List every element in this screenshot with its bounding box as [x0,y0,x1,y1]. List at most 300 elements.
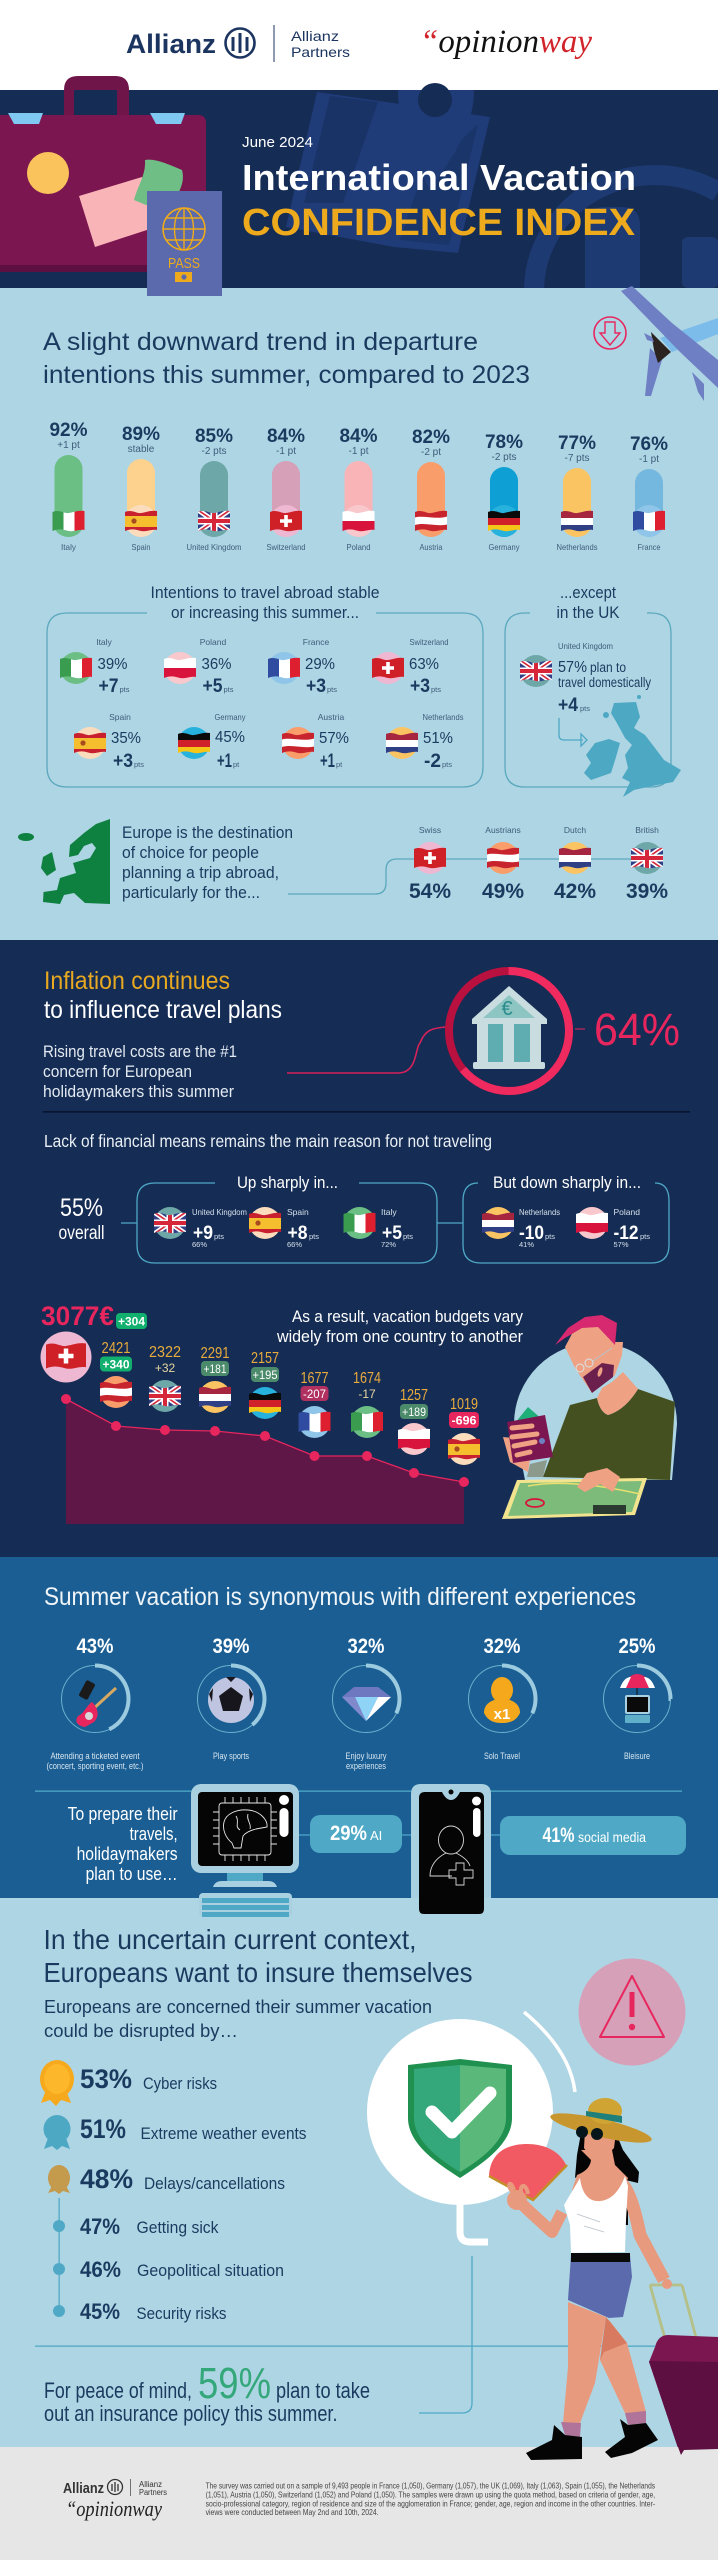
item: Switzerland [372,637,449,697]
item: Austria budget: +340 [102,1358,130,1372]
connector: Europe to nationalities [288,859,641,894]
heading: inflation: to influence travel plans [44,996,282,1024]
arrow: to UK map [559,718,587,746]
panel: departure intentions [0,286,718,940]
item: Poland: Poland [200,637,227,647]
item: France budget: 1677 [300,1370,328,1387]
item: Italy budget [351,1370,383,1438]
item: Netherlands: -2 [424,751,441,772]
risk: cyber: Cyber risks [143,2074,217,2093]
text: rising travel costs: holidaymakers this summer [43,1082,234,1101]
item: Austria: 57% [319,730,349,747]
bar: Germany [485,432,523,552]
risk: sick: Getting sick [136,2218,219,2237]
risk: geopolitical [53,2257,284,2282]
item: United Kingdom: pts [214,1232,224,1241]
item: Netherlands: pts [442,760,452,769]
line from shield bubble [419,2256,472,2413]
heading: except in the UK: ...except [560,583,616,602]
bar: Germany: 78% [485,432,523,453]
risk: security [53,2299,226,2324]
item: Netherlands: Netherlands [519,1207,560,1217]
text: to prepare their travels: travels, [130,1823,178,1844]
background Allianz arc motif [534,175,718,288]
heading: lack of financial means: Lack of financial means remains the main reason for not traveling [44,1131,492,1151]
illustration: passport overlap [147,288,222,296]
item: France: 29% [305,656,335,673]
item: Dutch: Dutch [564,825,586,835]
item: United Kingdom: 66% [192,1240,207,1249]
item: Italy: pts [403,1232,413,1241]
title [242,157,636,244]
item: France: +3 [306,676,326,697]
callout: social media: social media [578,1829,646,1845]
map: Europe [18,819,110,904]
icon: soccer ball [208,1677,254,1723]
callout: social media: 41% [542,1824,575,1847]
experience: play sports: Play sports [213,1751,249,1762]
heading: stable or increasing: Intentions to travel abroad stable [150,583,380,602]
survey methodology note: views were conducted between May 2nd and 10th, 2024. [206,2508,379,2517]
text: peace of mind: 59% [198,2359,271,2408]
experience: solo travel: 32% [484,1635,521,1658]
experience: play sports [198,1635,264,1762]
text: Europe destination [122,823,293,902]
illustration: airplane [621,286,718,401]
logo: Allianz Partners: Partners [291,44,350,60]
heading: inflation [44,967,282,1024]
illustration: passport: PASS [168,255,200,272]
item: Dutch [554,825,596,903]
bar: Germany: Germany [488,542,520,552]
risk: security: 45% [80,2299,120,2324]
bar: France [630,434,668,552]
text: peace of mind: For peace of mind, [44,2378,192,2403]
bar: Spain: 89% [122,424,160,445]
item: Italy: Italy [96,637,113,647]
experience: play sports: 39% [212,1635,250,1658]
figure: 64%: 64% [594,1004,680,1055]
logo: Allianz Partners footer: Allianz [63,2480,104,2497]
item: United Kingdom [154,1207,247,1249]
heading: A slight downward trend in departure [43,328,478,356]
item: Italy: 39% [98,656,128,673]
item: United Kingdom: United Kingdom [192,1207,247,1217]
logo: Allianz Partners footer: Allianz [139,2480,162,2489]
bar: Austria: Austria [420,542,443,552]
panel: down sharply [463,1173,669,1263]
figure: 55% overall: overall [58,1223,104,1244]
item: Italy: Italy [381,1207,397,1217]
experience: bleisure [604,1635,670,1762]
area and line [61,1394,469,1524]
bar: Austria [412,427,450,552]
bar: France: 76% [630,434,668,455]
text: vacation budgets vary [276,1308,524,1346]
item: Poland: pts [640,1232,650,1241]
tick to percent [575,1028,585,1030]
text: to prepare their travels: holidaymakers [77,1843,178,1864]
item: Spain budget: -696 [452,1414,477,1428]
panel: insurance [0,1898,718,2449]
item: Germany budget: +195 [252,1368,278,1382]
item: Netherlands: 41% [519,1240,534,1249]
chart: 64 percent ring [449,971,569,1091]
keyboard [199,1893,292,1917]
item: Switzerland: pts [431,685,441,694]
bar: Italy: 92% [49,420,88,441]
timeline line [58,2198,60,2310]
heading: up sharply: Up sharply in... [237,1173,338,1192]
connector: text to ring [287,1027,446,1073]
item: Italy: +5 [382,1223,402,1244]
divider [35,1790,682,1792]
item: Netherlands [386,712,464,772]
item: Poland [164,637,234,697]
panel: United Kingdom exception [505,583,681,797]
item: UK budget [149,1344,181,1412]
item: Germany [178,712,246,772]
item: Netherlands [482,1207,560,1249]
item: Austria: Austria [318,712,344,722]
title: CONFIDENCE INDEX [242,202,636,244]
icon: gold medal [40,2060,74,2106]
text: concerned: could be disrupted by… [44,2020,238,2041]
icon: solo traveller: x1 [494,1706,510,1723]
risk: weather [44,2114,306,2150]
item: Spain: pts [309,1232,319,1241]
UK figures: travel domestically [558,675,651,690]
icon: shield [408,2059,512,2178]
item: Austrians: Austrians [485,825,521,835]
item: Poland budget: 1257 [400,1387,428,1404]
experience: luxury: Enjoy luxury [346,1751,387,1762]
bar: United Kingdom [186,426,242,552]
risk: geopolitical: 46% [80,2257,121,2282]
item: Austria [282,712,349,772]
logo: Allianz Partners: Allianz [291,28,339,44]
item: Spain budget: 1019 [450,1396,478,1413]
text: to prepare their travels: To prepare their [68,1803,178,1824]
bar: Switzerland [266,426,306,552]
text: vacation budgets vary: As a result, vacation budgets vary [292,1308,524,1326]
bar: Netherlands: 77% [558,433,596,454]
risk: cyber: 53% [80,2064,132,2094]
icon: guitar and microphone [76,1680,116,1727]
heading: stable or increasing [150,583,380,622]
item: Italy: +7 [98,676,118,697]
illustration: passport [147,191,222,296]
item: Spain [74,712,144,772]
experience: ticketed event: (concert, sporting event, etc.) [46,1761,144,1772]
experience: luxury [332,1635,400,1772]
divider [43,1111,690,1113]
risk: delays: Delays/cancellations [144,2174,285,2193]
illustration: suitcase foot [678,2447,718,2455]
icon: person with cross [430,1826,473,1885]
chart: departure intentions by country [49,420,668,552]
item: Italy [344,1207,413,1249]
bar: United Kingdom: United Kingdom [186,542,242,552]
item: Spain [249,1207,319,1249]
illustration: suitcase [0,76,206,272]
bar: Switzerland: Switzerland [266,542,306,552]
item: Spain: Spain [109,712,131,722]
item: Germany: 45% [215,729,245,746]
bar: Switzerland: 84% [267,426,305,447]
item: Spain: +8 [288,1223,308,1244]
item: Swiss: 54% [409,880,451,903]
text: to prepare their travels [68,1803,178,1884]
item: United Kingdom: +9 [193,1223,213,1244]
bar: France: France [638,542,661,552]
item: Switzerland: 63% [409,656,439,673]
item: Italy: 72% [381,1240,396,1249]
heading: except in the UK [556,583,620,622]
title: International Vacation [242,157,636,198]
item: France: France [303,637,329,647]
UK figures: United Kingdom [558,641,613,651]
text: peace of mind [44,2359,370,2426]
bar: Spain: Spain [132,542,151,552]
figure: 55% overall [58,1194,104,1244]
item: Germany: Germany [214,712,246,722]
text: Europe destination: planning a trip abroad, [122,863,279,882]
icon: umbrella and laptop [620,1674,655,1723]
panel: summer experiences [0,1557,718,1898]
item: UK budget: +32 [155,1361,176,1375]
item: Italy: pts [120,685,130,694]
bar: United Kingdom: -2 pts [201,446,227,457]
text: Europe destination: Europe is the destination [122,823,293,842]
item: British: 39% [626,880,668,903]
text: vacation budgets vary: widely from one country to another [276,1328,523,1346]
item: Netherlands: 51% [423,730,453,747]
heading: insurance: In the uncertain current context, [44,1924,416,1955]
connector lines [299,1834,500,1836]
item: Poland: 57% [614,1240,629,1249]
bar: Netherlands [556,433,598,552]
heading: insurance: Europeans want to insure themselves [44,1957,472,1988]
text: rising travel costs: Rising travel costs are the #1 [43,1042,237,1061]
item: Netherlands budget: 2291 [200,1345,230,1362]
illustration: woman with hat, fan and suitcase [489,2098,718,2449]
bar: Austria: 82% [412,427,450,448]
text: Europe destination: particularly for the... [122,883,260,902]
risk: sick: 47% [80,2214,120,2239]
item: Switzerland: Switzerland [410,637,449,647]
item: Poland budget: +189 [402,1405,426,1419]
bar: Netherlands: -7 pts [564,453,590,464]
callout: AI: AI [370,1828,382,1843]
figure: 55% overall: 55% [60,1194,103,1222]
logo: Allianz Partners [126,25,350,62]
illustration: shoes over footer [526,2419,658,2460]
icon: diamond [342,1687,391,1721]
illustration: smartphone with social media [411,1784,491,1914]
item: Swiss: Swiss [419,825,441,835]
icon: bronze medal [48,2165,70,2194]
logo: opinionway: “opinionway [420,24,592,60]
text: peace of mind: out an insurance policy this summer. [44,2401,338,2426]
item: Spain budget [448,1396,480,1465]
item: Germany: pt [233,760,240,769]
illustration: computer with AI [191,1784,299,1917]
UK figures: 57% [558,659,587,676]
item: Germany budget [249,1350,281,1419]
illustration: man with wallet and map [502,1315,677,1519]
item: Switzerland: +3 [410,676,430,697]
bar: Germany: -2 pts [491,452,517,463]
panel: stable or increasing [47,583,483,787]
divider [35,2346,655,2347]
item: Italy budget: 1674 [353,1370,381,1387]
bar: Poland: -1 pt [348,446,369,457]
item: Spain: pts [134,760,144,769]
item: Poland [576,1207,650,1249]
text: Europe destination: of choice for people [122,843,259,862]
item: Austrians [482,825,524,903]
item: Poland: +5 [202,676,223,697]
header logo band [0,0,718,90]
risk: sick [53,2214,219,2239]
risk: geopolitical: Geopolitical situation [137,2261,284,2280]
date: June 2024 [242,134,313,151]
item: Poland: pts [224,685,234,694]
item: Austria budget [100,1340,132,1408]
risk: security: Security risks [136,2304,226,2323]
item: British: British [635,825,659,835]
item: Spain: Spain [287,1207,309,1217]
bar: Spain: stable [128,444,155,455]
experience: luxury: experiences [346,1761,386,1772]
risk: delays: 48% [80,2164,133,2194]
UK figures: plan to [590,660,626,675]
text: peace of mind: plan to take [276,2378,370,2403]
item: Italy budget: -17 [358,1387,376,1401]
risk: weather: 51% [80,2114,126,2144]
heading: except in the UK: in the UK [556,603,620,622]
bar: Spain [122,424,160,552]
icon: blue medal [44,2115,70,2150]
panel: hero banner [0,76,718,296]
bar: Poland: 84% [339,426,378,447]
heading [43,328,530,389]
logo: opinionway footer: “opinionway [66,2496,162,2521]
heading: insurance [44,1924,472,1988]
connector lines [121,1222,463,1224]
item: Austria: +1 [320,751,335,772]
icon: warning [578,1958,686,2066]
item: Netherlands budget [199,1345,231,1413]
background map and pin motif [286,83,490,253]
risk: weather: Extreme weather events [140,2124,306,2143]
item: Germany budget: 2157 [251,1350,279,1367]
item: Spain: +3 [113,751,133,772]
chart: vacation budgets [40,1301,480,1524]
item: Netherlands: pts [545,1232,555,1241]
UK figures: pts [580,704,590,713]
item: British [626,825,668,903]
item: Switzerland budget: 3077€ [41,1301,114,1331]
item: Switzerland budget [40,1301,147,1382]
item: Poland budget [398,1387,430,1455]
UK figures [520,641,651,716]
panel: inflation [0,940,718,1558]
bar: Austria: -2 pt [421,447,441,458]
panel: up sharply [137,1173,437,1263]
experience: ticketed event [46,1635,144,1772]
heading: intentions this summer, compared to 2023 [43,361,530,389]
item: Netherlands: Netherlands [422,712,464,722]
survey methodology note [206,2482,655,2517]
bar: Italy: +1 pt [57,440,80,451]
heading: inflation: Inflation continues [44,967,230,995]
bar: Switzerland: -1 pt [276,446,296,457]
callout: AI [310,1815,402,1853]
bar: Netherlands: Netherlands [556,542,598,552]
bar: Poland: Poland [346,542,371,552]
item: Dutch: 42% [554,880,596,903]
item: Austria: pt [336,760,343,769]
experience: ticketed event: 43% [76,1635,114,1658]
item: France budget [298,1370,330,1438]
UK figures: +4 [558,695,578,716]
bar: Italy [49,420,88,552]
text: rising travel costs: concern for European [43,1062,192,1081]
logo: Allianz Partners footer [63,2479,167,2497]
icon: bank: € [501,998,513,1020]
callout: social media [500,1816,686,1855]
item: Italy [60,637,130,697]
experience: solo travel [468,1635,536,1762]
icon: brain chip [213,1797,277,1861]
item: Spain: 66% [287,1240,302,1249]
heading: summer experiences: Summer vacation is synonymous with different experiences [44,1583,636,1611]
heading: stable or increasing: or increasing this summer... [171,603,359,622]
experience: solo travel: Solo Travel [484,1751,520,1762]
item: Swiss [409,825,451,903]
item: Poland: 36% [202,656,232,673]
bar: France: -1 pt [639,454,659,465]
logo: Allianz Partners footer: Partners [139,2488,167,2497]
bar: Poland [339,426,378,552]
text: concerned [44,1996,432,2041]
text: concerned: Europeans are concerned their summer vacation [44,1996,432,2017]
item: Switzerland budget: +304 [118,1314,145,1328]
item: Poland: -12 [614,1223,638,1244]
item: Germany: +1 [217,751,232,772]
bar: Italy: Italy [61,542,77,552]
map: United Kingdom and Ireland [584,695,681,797]
item: Netherlands budget: +181 [204,1362,227,1376]
risk: cyber [40,2060,217,2106]
experience: luxury: 32% [348,1635,385,1658]
experience: bleisure: Bleisure [624,1751,650,1762]
callout: AI: 29% [330,1822,367,1845]
item: France budget: -207 [303,1387,326,1401]
bar: United Kingdom: 85% [195,426,233,447]
item: Netherlands: -10 [519,1223,544,1244]
item: Spain: 35% [111,730,141,747]
footer [0,2419,718,2560]
item: Austria budget: 2421 [102,1340,130,1357]
illustration: shield bubble [367,2012,575,2242]
item: France [268,637,337,697]
item: France: pts [327,685,337,694]
item: Austrians: 49% [482,880,524,903]
text: rising travel costs [43,1042,237,1101]
